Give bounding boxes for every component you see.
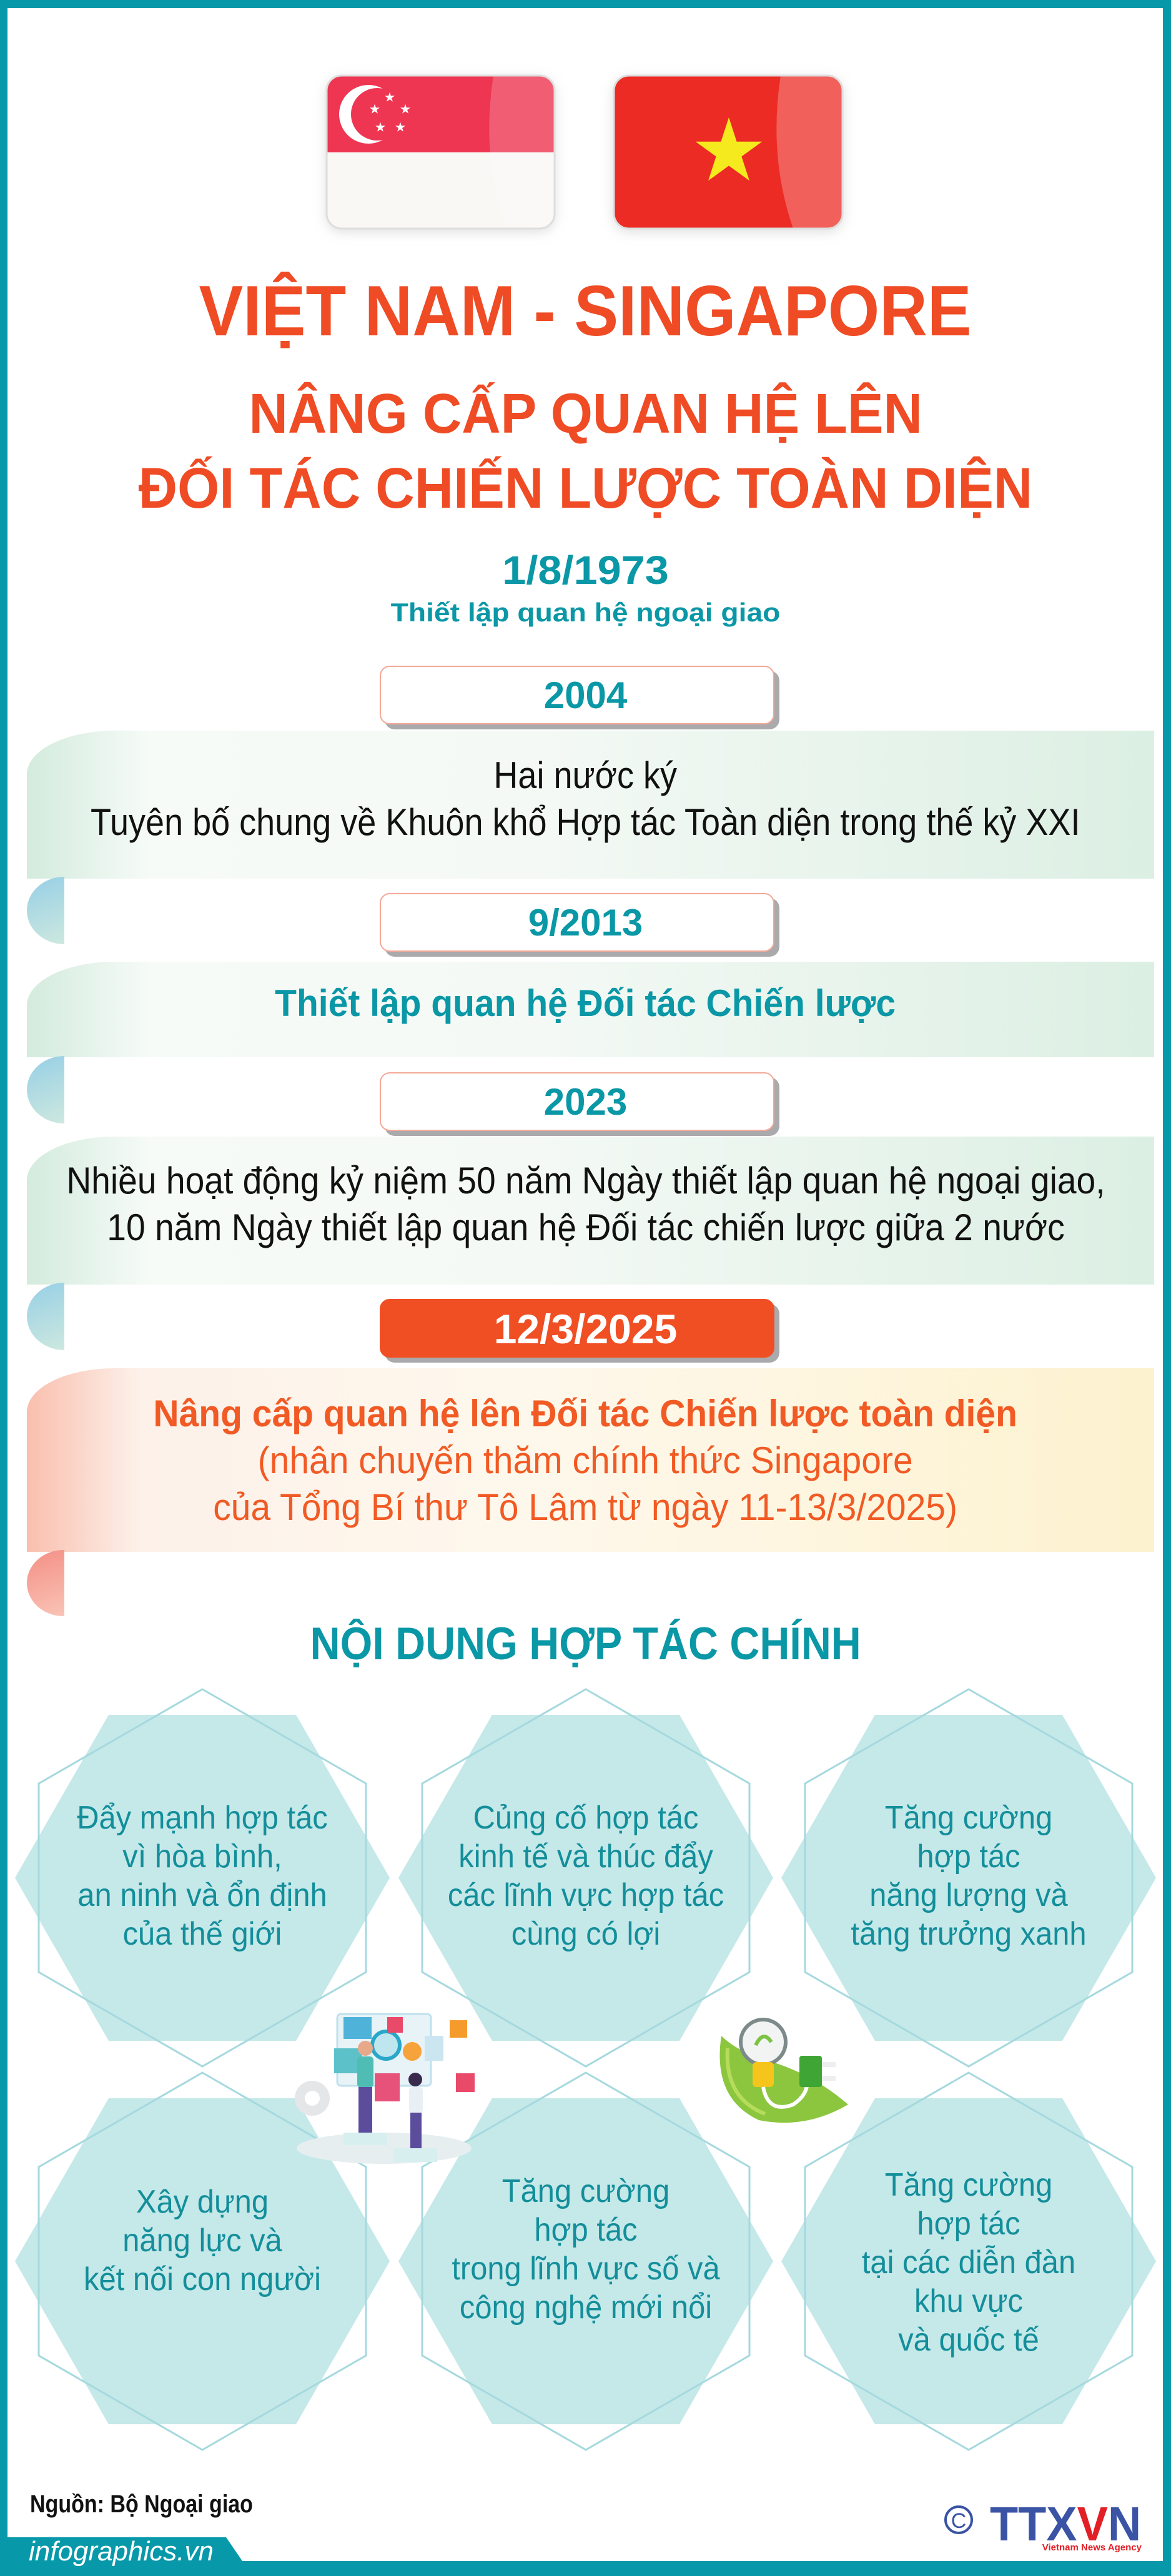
- label 12/3/2025: 12/3/2025: [494, 1306, 677, 1352]
- hexagon 6: Tăng cường: [885, 2166, 1052, 2203]
- box: 2004: [380, 666, 774, 724]
- illustration: digital people: [295, 2014, 475, 2164]
- logo: TTXVN: C: [951, 2509, 966, 2533]
- text: establish diplomatic relations: Thiết lập quan hệ ngoại giao: [391, 598, 780, 627]
- hexagon grid: [15, 1688, 1156, 2451]
- hexagon 2: Củng cố hợp tác: [473, 1799, 698, 1835]
- hexagon 4: kết nối con người: [84, 2261, 321, 2297]
- text band 1: [91, 754, 1080, 843]
- flag: Singapore: [327, 76, 555, 232]
- hexagon 5: công nghệ mới nổi: [460, 2289, 712, 2325]
- text band 1: Hai nước ký: [494, 754, 677, 796]
- hexagon 6: hợp tác: [917, 2205, 1020, 2241]
- curl 3: [27, 1283, 64, 1350]
- label 2004: 2004: [544, 674, 627, 716]
- text band 2: Thiết lập quan hệ Đối tác Chiến lược: [275, 982, 896, 1024]
- text band 1: Tuyên bố chung về Khuôn khổ Hợp tác Toàn diện trong thế kỷ XXI: [91, 801, 1080, 843]
- footer site name: infographics.vn: [29, 2536, 214, 2567]
- box: 2023: [380, 1072, 774, 1131]
- hexagon 6: [781, 2073, 1156, 2450]
- hexagon 6: khu vực: [914, 2282, 1023, 2319]
- hexagon 2: cùng có lợi: [511, 1915, 660, 1952]
- hexagon 4: Xây dựng: [136, 2183, 269, 2219]
- text band 4: Nâng cấp quan hệ lên Đối tác Chiến lược toàn diện: [154, 1393, 1017, 1434]
- curl 4: [27, 1550, 64, 1616]
- hexagon 4: năng lực và: [122, 2222, 283, 2258]
- hexagon 5: Tăng cường: [502, 2173, 669, 2209]
- text band 3: Nhiều hoạt động kỷ niệm 50 năm Ngày thiết lập quan hệ ngoại giao,: [66, 1160, 1105, 1202]
- band 3: [27, 1137, 1154, 1285]
- text band 4: (nhân chuyến thăm chính thức Singapore: [258, 1439, 913, 1481]
- band 1: [27, 731, 1154, 879]
- hexagon 3: hợp tác: [917, 1838, 1020, 1874]
- hexagon 3: tăng trưởng xanh: [851, 1915, 1087, 1952]
- date 1/8/1973: 1/8/1973: [502, 548, 669, 593]
- label 9/2013: 9/2013: [528, 902, 643, 944]
- text band 4: của Tổng Bí thư Tô Lâm từ ngày 11-13/3/2025): [214, 1486, 957, 1528]
- band 2: [27, 962, 1154, 1057]
- hexagon 5: trong lĩnh vực số và: [452, 2250, 721, 2286]
- subtitle line 1: NÂNG CẤP QUAN HỆ LÊN: [249, 383, 922, 445]
- hexagon 4: [15, 2073, 390, 2450]
- flags: [322, 74, 847, 236]
- curl 1: [27, 877, 64, 944]
- title: VIỆT NAM - SINGAPORE: [199, 272, 972, 351]
- hexagon 3: năng lượng và: [869, 1877, 1069, 1913]
- logo: TTXVN: Vietnam News Agency: [1042, 2542, 1142, 2553]
- hexagon 1: an ninh và ổn định: [77, 1877, 327, 1913]
- illustration: green energy bulb: [719, 2020, 848, 2123]
- hexagon 5: hợp tác: [534, 2211, 638, 2248]
- hexagon 3: Tăng cường: [885, 1799, 1052, 1835]
- hexagon 6: và quốc tế: [898, 2321, 1039, 2357]
- hexagon 6: tại các diễn đàn: [862, 2244, 1075, 2280]
- hexagon 1: vì hòa bình,: [122, 1838, 282, 1874]
- curl 2: [27, 1056, 64, 1123]
- hexagon 2: [398, 1689, 773, 2066]
- heading: main cooperation: NỘI DUNG HỢP TÁC CHÍNH: [310, 1619, 861, 1669]
- subtitle line 2: ĐỐI TÁC CHIẾN LƯỢC TOÀN DIỆN: [139, 456, 1032, 520]
- hexagon 1: Đẩy mạnh hợp tác: [77, 1799, 328, 1835]
- footer bar: [7, 2537, 1163, 2576]
- hexagon 2: kinh tế và thúc đẩy: [458, 1838, 713, 1874]
- text band 3: [66, 1160, 1105, 1248]
- hexagon 2: các lĩnh vực hợp tác: [448, 1877, 724, 1913]
- box: 12/3/2025: [380, 1299, 774, 1358]
- box: 9/2013: [380, 893, 774, 952]
- hexagon 3: [781, 1689, 1156, 2066]
- source: Nguồn: Bộ Ngoại giao: [30, 2490, 253, 2518]
- label 2023: 2023: [544, 1081, 627, 1123]
- hexagon 1: [15, 1689, 390, 2066]
- band 4: [27, 1368, 1154, 1552]
- flag: Vietnam: [614, 76, 842, 232]
- text band 4: [154, 1393, 1017, 1528]
- logo: TTXVN: TTXVN: [990, 2498, 1141, 2550]
- hexagon 1: của thế giới: [123, 1915, 282, 1952]
- text band 3: 10 năm Ngày thiết lập quan hệ Đối tác chiến lược giữa 2 nước: [107, 1207, 1064, 1248]
- hexagon 5: [398, 2073, 773, 2450]
